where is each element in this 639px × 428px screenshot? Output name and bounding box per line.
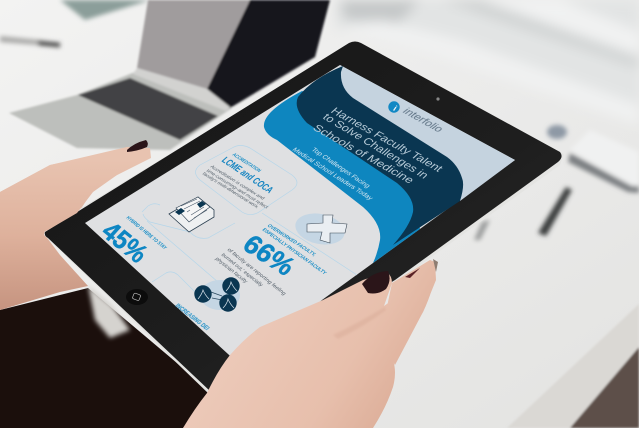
right hand xyxy=(183,259,438,428)
palm and thumb xyxy=(183,266,434,428)
white chair leg, blurred xyxy=(88,285,130,338)
stat 66 percent: 66% xyxy=(237,229,301,281)
title: Harness Faculty Talent xyxy=(328,106,446,174)
stat 45 percent: 45% xyxy=(96,216,154,269)
left thumb over tablet xyxy=(0,140,151,250)
tablet bezel xyxy=(45,42,562,392)
title: Schools of Medicine xyxy=(310,122,418,186)
stat 45 percent: HYBRID IS HERE TO STAY xyxy=(124,216,168,251)
blurred objects on the desk, right xyxy=(474,125,639,240)
stat 66 percent xyxy=(214,224,328,296)
icon: documents xyxy=(169,197,214,232)
dark band xyxy=(297,66,463,245)
card: accreditation xyxy=(201,153,276,210)
laptop base xyxy=(9,70,232,150)
laptop xyxy=(9,0,330,150)
tablet silver edge xyxy=(44,41,564,395)
left floor dark area xyxy=(0,288,215,428)
icon: connected people xyxy=(194,277,240,312)
blurred pen left xyxy=(0,36,60,48)
second pen under the tablet xyxy=(474,220,490,240)
tablet stack xyxy=(60,0,150,20)
logo interfolio: interfolio xyxy=(400,106,447,134)
back finger xyxy=(380,260,436,365)
accreditation label: ACCREDITATION xyxy=(230,153,262,174)
pen xyxy=(538,187,572,236)
connector outlines xyxy=(142,146,357,302)
title: to Solve Challenges in xyxy=(320,112,431,181)
nail right xyxy=(362,271,390,294)
stat 66 percent: of faculty are reporting feeling xyxy=(226,248,287,296)
left hand below tablet xyxy=(0,147,150,310)
tablet xyxy=(44,41,564,395)
blue band xyxy=(264,91,420,263)
screen xyxy=(85,65,515,365)
stat 66 percent: ESPECIALLY PHYSICIAN FACULTY xyxy=(260,228,328,276)
knuckle crease shading xyxy=(333,307,386,339)
LCME heading: LCME and COCA xyxy=(219,155,276,196)
home button xyxy=(126,289,148,305)
stat 66 percent: OVERWORKED FACULTY, xyxy=(265,224,317,258)
top left objects xyxy=(0,0,150,48)
laptop screen grey part xyxy=(137,0,250,89)
keyboard xyxy=(78,78,218,140)
header pale band xyxy=(330,65,515,201)
increasing DEI label: INCREASING DEI xyxy=(173,303,210,332)
accreditation body text: faculty's multi-dimensional work. xyxy=(201,172,260,210)
stat 66 percent: burned out,' especially xyxy=(220,253,264,288)
logo interfolio: i xyxy=(391,104,399,113)
laptop screen black part xyxy=(207,0,330,108)
subtitle: Top Challenges Facing xyxy=(310,147,372,189)
stat 66 percent: physician faculty xyxy=(214,257,249,284)
subtitle: Medical School Leaders Today xyxy=(291,147,375,202)
desk edge and dark base, bottom right xyxy=(507,304,639,428)
phone on desk xyxy=(570,130,639,188)
logo interfolio xyxy=(388,101,447,134)
camera xyxy=(436,97,440,101)
nail left xyxy=(127,140,148,152)
icon: medical cross xyxy=(292,209,348,249)
window and wall bands, blurred, top right xyxy=(335,0,639,125)
accreditation body text: time-consuming–and must reflect xyxy=(205,169,270,210)
clip xyxy=(547,125,567,139)
accreditation body text: Accreditation is complex and xyxy=(209,165,266,201)
hinge strip xyxy=(133,68,230,111)
